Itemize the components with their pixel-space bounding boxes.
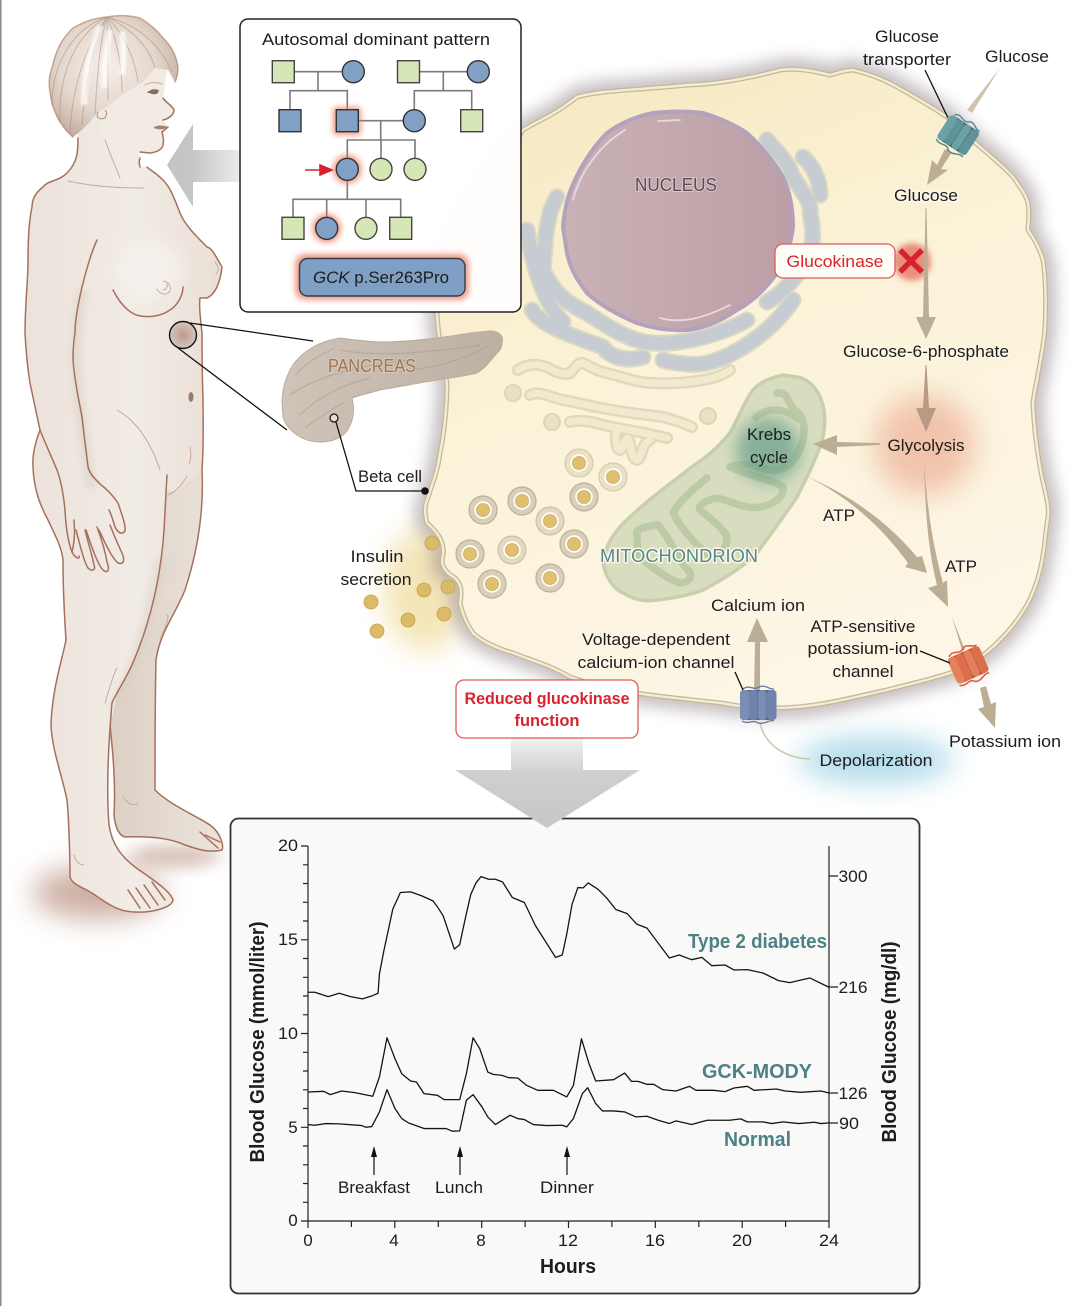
organelle: endoplasmic reticulum [527, 140, 820, 364]
panel: cell [383, 69, 1048, 708]
cell labels: cycle [750, 448, 788, 467]
mutation badge [300, 258, 465, 296]
granules: secreted insulin [364, 536, 455, 638]
x axis [303, 1221, 839, 1278]
line: normal [308, 1088, 829, 1131]
cell labels: Potassium ion [949, 732, 1061, 751]
callout: glucokinase: Glucokinase [786, 252, 884, 271]
mutation badge: GCK p.Ser263Pro [313, 268, 449, 287]
right axis [829, 846, 901, 1221]
x axis: 8 [476, 1231, 486, 1250]
x axis: 16 [645, 1231, 665, 1250]
arrow: pedigree to patient [167, 124, 240, 207]
icon: ATP-sensitive potassium channel [945, 641, 992, 689]
glow: glucokinase defect [893, 243, 931, 281]
cell labels: Glucose-6-phosphate [843, 342, 1009, 361]
callout: beta cell leader [170, 322, 429, 495]
leader lines [735, 70, 950, 690]
right axis: Blood Glucose (mg/dl) [879, 942, 901, 1142]
cell labels: Depolarization [820, 751, 932, 770]
cell labels: potassium-ion [808, 639, 918, 658]
callout: reduced glucokinase function [456, 680, 638, 738]
x axis: 20 [732, 1231, 752, 1250]
glow: depolarization [798, 736, 954, 784]
cell labels [328, 27, 1061, 770]
cell labels: NUCLEUS [635, 175, 717, 195]
series labels: Normal [724, 1129, 791, 1151]
x axis: 12 [558, 1231, 578, 1250]
left axis: 5 [288, 1118, 298, 1137]
cell labels: Krebs [747, 425, 791, 444]
figure: patient body [25, 70, 222, 919]
cell labels: ATP [945, 557, 977, 576]
icon: voltage-dependent calcium channel [740, 686, 776, 723]
callout: reduced glucokinase function: Reduced glucokinase [464, 689, 630, 708]
cell labels: PANCREAS [328, 356, 416, 376]
x axis: 0 [303, 1231, 313, 1250]
x axis: 24 [819, 1231, 839, 1250]
cell labels: ATP-sensitive [810, 617, 916, 636]
meal markers: Lunch [435, 1178, 483, 1197]
x axis: Hours [540, 1256, 596, 1278]
x axis: 4 [389, 1231, 399, 1250]
icon: glucose transporter [934, 111, 983, 160]
meal markers: Breakfast [338, 1178, 410, 1197]
series labels: GCK-MODY [702, 1061, 813, 1083]
icon: red X [902, 252, 920, 270]
cell labels: MITOCHONDRION [600, 546, 758, 566]
right axis: 90 [839, 1114, 859, 1133]
left axis [247, 836, 308, 1230]
line: GCK-MODY [308, 1038, 829, 1100]
pathway arrows [747, 68, 1000, 759]
right axis: 300 [838, 867, 868, 886]
cell labels: Calcium ion [711, 596, 805, 615]
glow: glycolysis [875, 395, 975, 495]
pedigree lines [290, 72, 472, 217]
right axis: 216 [838, 978, 868, 997]
cell labels: Glucose [985, 47, 1049, 66]
pedigree symbols [272, 61, 489, 239]
cell labels: Beta cell [358, 467, 422, 486]
granules: insulin vesicles inside cell [456, 449, 627, 598]
proband arrow [305, 165, 332, 175]
organelle: mitochondrion [603, 375, 825, 601]
callout: glucokinase [775, 244, 895, 278]
cell labels: ATP [823, 506, 855, 525]
cell labels: secretion [340, 570, 412, 589]
figure: head and hair [49, 16, 178, 153]
affected glow highlights [295, 107, 469, 300]
cell labels: Voltage-dependent [582, 630, 730, 649]
left axis: 20 [278, 836, 298, 855]
cell labels: Glycolysis [888, 436, 964, 455]
line: type 2 diabetes [308, 877, 829, 999]
left axis: 10 [278, 1024, 298, 1043]
organelle: Golgi apparatus [505, 363, 730, 460]
panel: pedigree [240, 19, 521, 312]
panel: glucose chart [230, 818, 920, 1294]
callout: reduced glucokinase function: function [514, 711, 580, 730]
pedigree title: Autosomal dominant pattern [262, 30, 490, 49]
left axis: Blood Glucose (mmol/liter) [247, 922, 269, 1162]
cell labels: Insulin [350, 547, 404, 566]
organ: pancreas [282, 331, 502, 442]
cell labels: channel [832, 662, 894, 681]
cell labels: transporter [863, 50, 951, 69]
organelle: nucleus [563, 112, 793, 330]
meal markers: Dinner [540, 1178, 594, 1197]
meal markers [338, 1146, 594, 1197]
series labels: Type 2 diabetes [688, 931, 827, 953]
cell labels: Glucose [894, 186, 958, 205]
series labels [688, 931, 827, 1151]
left axis: 0 [288, 1211, 298, 1230]
left axis: 15 [278, 930, 298, 949]
cell labels: calcium-ion channel [578, 653, 734, 672]
page edge line [0, 0, 2, 1306]
cell labels: Glucose [875, 27, 939, 46]
right axis: 126 [838, 1084, 868, 1103]
arrow: cell to chart [455, 738, 640, 828]
